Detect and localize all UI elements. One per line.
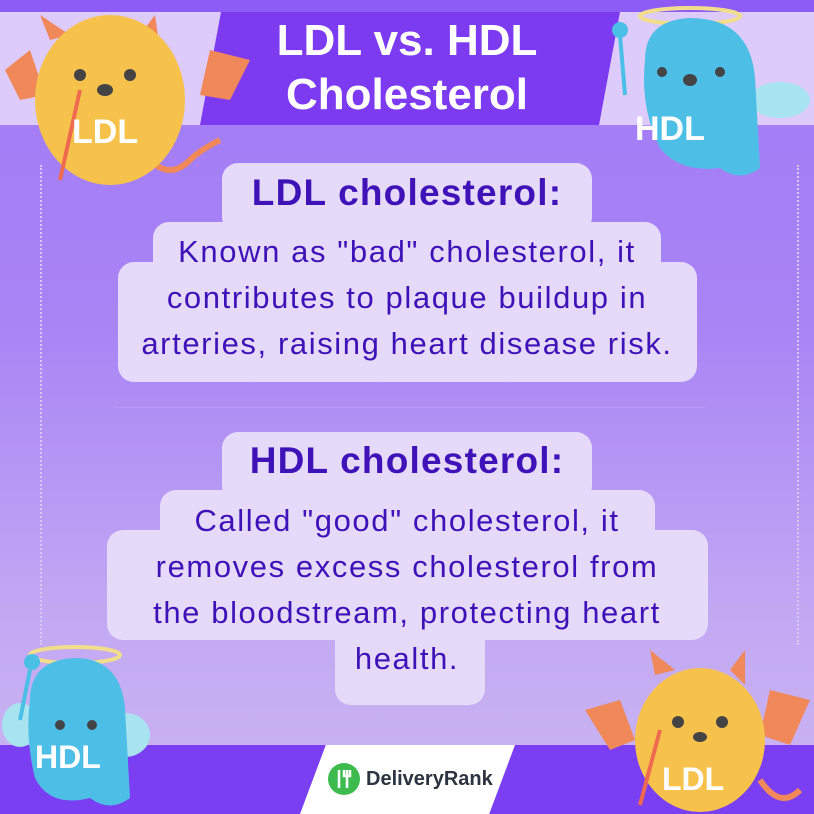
icon: LDL devil bottom-right: LDL [662, 761, 724, 797]
title banner [200, 12, 620, 125]
text: LDL description: contributes to plaque buildup in [167, 280, 647, 315]
logo: DeliveryRank [300, 745, 515, 814]
top band [0, 0, 814, 12]
title: LDL vs. HDL [277, 16, 537, 65]
text: HDL description: health. [355, 641, 459, 676]
icon: HDL angel top-right [612, 6, 810, 176]
text: HDL description [153, 503, 661, 676]
text: HDL description: Called "good" cholesterol, it [194, 503, 620, 538]
icon: LDL devil bottom-right [585, 650, 810, 812]
panel: HDL [107, 432, 708, 705]
dotted guides [40, 165, 42, 645]
icon: LDL devil top-left [5, 15, 250, 185]
text: HDL description: the bloodstream, protecting heart [153, 595, 661, 630]
icon: LDL devil top-left: LDL [72, 113, 138, 151]
title: Cholesterol [286, 70, 528, 119]
text: LDL description [141, 234, 673, 361]
logo: DeliveryRank: DeliveryRank [366, 768, 493, 790]
panel: LDL [118, 163, 697, 382]
text: HDL description: removes excess cholesterol from [156, 549, 658, 584]
text: LDL description: Known as "bad" cholesterol, it [178, 234, 636, 269]
icon: HDL angel bottom-left: HDL [35, 739, 101, 775]
bottom band [0, 745, 814, 814]
heading: HDL cholesterol: HDL cholesterol: [250, 440, 564, 481]
text: LDL description: arteries, raising heart disease risk. [141, 326, 673, 361]
icon: HDL angel bottom-left [2, 645, 150, 806]
title [277, 16, 537, 119]
icon: HDL angel top-right: HDL [635, 110, 705, 148]
heading: LDL cholesterol: LDL cholesterol: [252, 172, 562, 213]
